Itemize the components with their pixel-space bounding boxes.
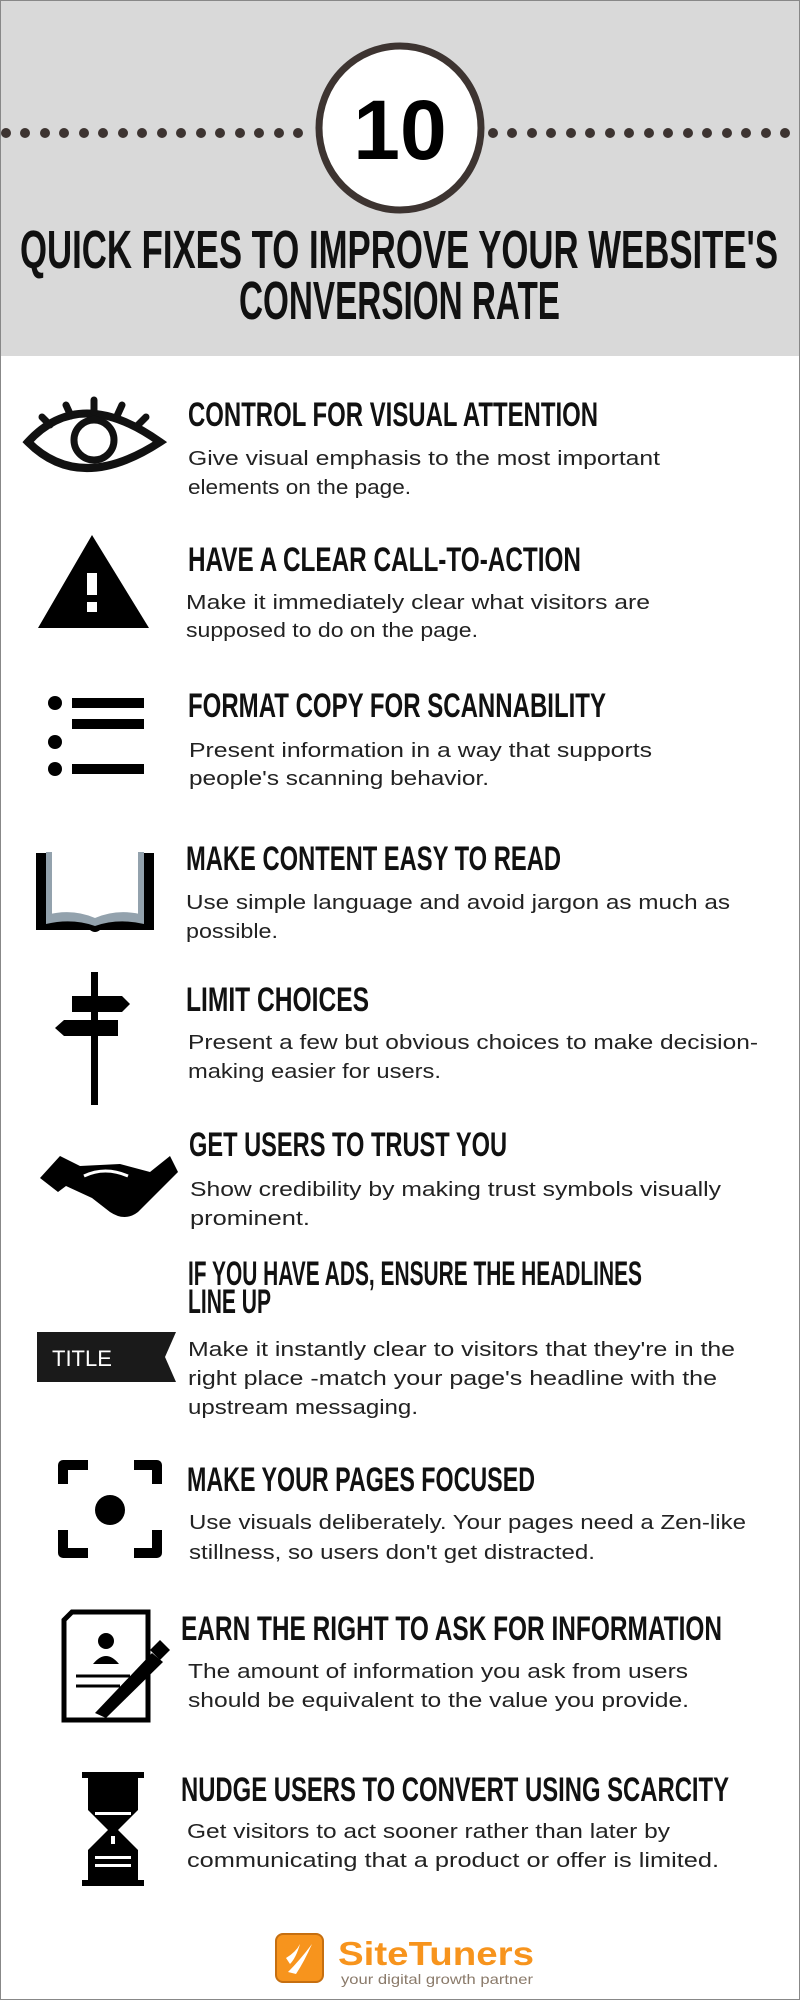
item 5: making easier for users. [188, 1061, 441, 1083]
icon: focus frame [63, 1465, 157, 1553]
item 10 [82, 1771, 729, 1886]
item 1 [28, 396, 661, 499]
item 2: HAVE A CLEAR CALL-TO-ACTION [188, 541, 581, 579]
item 6: GET USERS TO TRUST YOU [189, 1126, 507, 1164]
icon: list [48, 696, 144, 776]
item 8: MAKE YOUR PAGES FOCUSED [187, 1461, 535, 1499]
item 3: FORMAT COPY FOR SCANNABILITY [188, 687, 606, 725]
item 2: supposed to do on the page. [186, 620, 478, 642]
icon: title tag: TITLE [52, 1346, 112, 1371]
item 7 [37, 1255, 735, 1419]
item 7: Make it instantly clear to visitors that they're in the [188, 1339, 735, 1361]
item 7: upstream messaging. [188, 1397, 418, 1419]
item 9 [64, 1610, 722, 1720]
number badge: 10 [353, 83, 447, 177]
logo: SiteTuners: SiteTuners [338, 1935, 534, 1972]
icon: eye [28, 400, 160, 468]
item 1: elements on the page. [188, 477, 411, 499]
item 1: CONTROL FOR VISUAL ATTENTION [188, 396, 598, 434]
item 9: The amount of information you ask from users [188, 1661, 688, 1683]
item 2: Make it immediately clear what visitors are [186, 592, 650, 614]
item 7: right place -match your page's headline with the [188, 1368, 717, 1390]
item 10: communicating that a product or offer is limited. [187, 1850, 719, 1872]
item 6: prominent. [190, 1208, 310, 1230]
item 3: people's scanning behavior. [189, 768, 489, 790]
icon: warning triangle [38, 535, 149, 628]
icon: hourglass [82, 1772, 144, 1886]
item 5: Present a few but obvious choices to make decision- [188, 1032, 758, 1054]
icon: title tag [37, 1332, 176, 1382]
number badge [319, 46, 481, 210]
item 8 [63, 1461, 746, 1564]
item 5 [55, 972, 758, 1105]
title: CONVERSION RATE [239, 271, 560, 331]
item 4: MAKE CONTENT EASY TO READ [186, 840, 561, 878]
item 1: Give visual emphasis to the most important [188, 448, 661, 470]
item 7: LINE UP [188, 1283, 271, 1321]
icon: book [36, 849, 154, 932]
item 4: Use simple language and avoid jargon as much as [186, 892, 730, 914]
item 3 [48, 687, 652, 790]
icon: form and pen [64, 1612, 170, 1720]
title [20, 220, 778, 331]
item 9: should be equivalent to the value you provide. [188, 1690, 689, 1712]
logo: SiteTuners [276, 1934, 534, 1987]
item 6: Show credibility by making trust symbols visually [190, 1179, 721, 1201]
item 2 [38, 535, 650, 642]
item 4: possible. [186, 921, 278, 943]
item 3: Present information in a way that supports [189, 740, 652, 762]
item 4 [36, 840, 730, 943]
icon: handshake [40, 1156, 178, 1217]
header panel [1, 1, 799, 356]
logo: SiteTuners: your digital growth partner [341, 1971, 533, 1987]
item 8: stillness, so users don't get distracted. [189, 1542, 595, 1564]
item 8: Use visuals deliberately. Your pages need a Zen-like [189, 1512, 746, 1534]
item 10: Get visitors to act sooner rather than later by [187, 1821, 670, 1843]
item 6 [40, 1126, 721, 1230]
item 5: LIMIT CHOICES [186, 981, 369, 1019]
icon: signpost [55, 972, 130, 1105]
